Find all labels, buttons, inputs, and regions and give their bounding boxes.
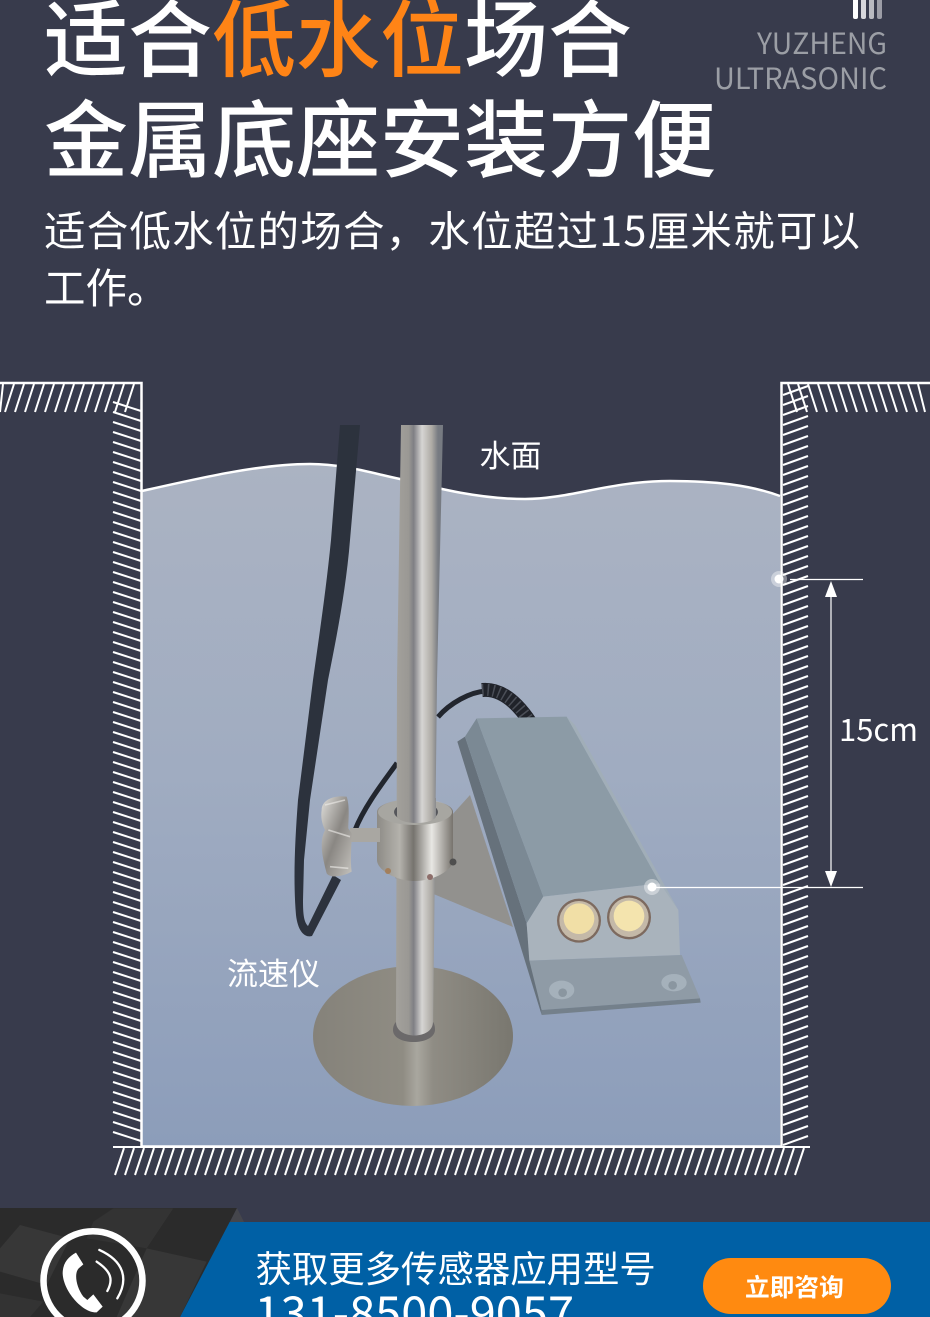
ultrasonic lens right — [607, 895, 651, 939]
description text: 适合低水位的场合，水位超过15厘米就可以 — [44, 198, 860, 258]
screw left — [549, 981, 574, 999]
water surface line — [142, 464, 780, 499]
dark panel — [0, 1208, 237, 1317]
pole — [396, 425, 443, 1039]
knob — [321, 796, 352, 876]
knob bolt — [350, 828, 380, 842]
screw right — [661, 974, 687, 991]
hatching: ground — [0, 384, 925, 1175]
description text — [44, 198, 860, 315]
collar top face — [378, 799, 452, 825]
ultrasonic lens left — [557, 899, 601, 943]
tank diagram — [0, 383, 930, 1175]
corrugated cable end — [482, 690, 530, 722]
label: water surface: 水面 — [480, 431, 542, 476]
logo: Yuzheng Ultrasonic: YUZHENG — [756, 21, 887, 63]
tank walls — [0, 383, 930, 1146]
water — [142, 464, 780, 1146]
blue band — [170, 1222, 930, 1317]
flow meter device — [295, 425, 701, 1106]
dimension: 15cm: 15cm — [839, 705, 918, 750]
footer contact bar — [0, 1208, 930, 1317]
collar welds — [385, 858, 456, 880]
icon: phone — [44, 1231, 142, 1317]
cta text: 获取更多传感器应用型号 — [256, 1241, 656, 1293]
dimension: 15cm — [644, 571, 918, 895]
panel tiles — [0, 1208, 207, 1317]
base disc — [313, 966, 513, 1106]
weld ring — [393, 1022, 435, 1042]
sensor cable — [355, 691, 486, 830]
sensor body — [457, 717, 701, 1015]
button label: 立即咨询 — [745, 1268, 844, 1304]
power cable — [295, 425, 360, 936]
button — [703, 1258, 891, 1314]
logo: Yuzheng Ultrasonic: ULTRASONIC — [714, 56, 887, 98]
title: 金属底座安装方便 — [44, 74, 716, 196]
collar clamp — [377, 799, 453, 881]
description text: 工作。 — [44, 255, 169, 315]
pole above collar — [397, 798, 436, 823]
bracket — [395, 795, 513, 927]
label: flow meter: 流速仪 — [227, 949, 320, 994]
logo: Yuzheng Ultrasonic — [714, 0, 887, 98]
title — [44, 0, 716, 196]
